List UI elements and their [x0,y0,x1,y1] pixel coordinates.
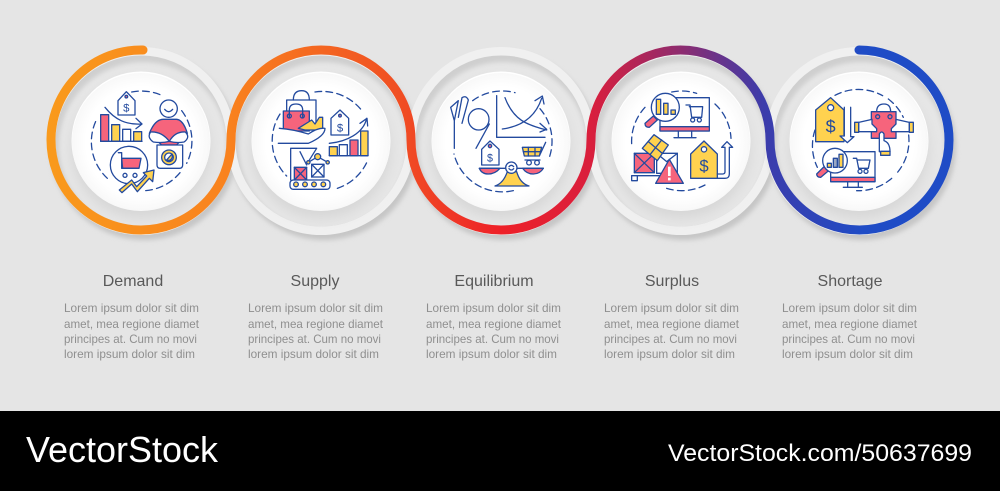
text block: supply: amet, mea regione diamet [248,317,384,331]
text block: surplus: principes at. Cum no movi [604,332,737,346]
icon: equilibrium [451,91,552,192]
footer logo: VectorStock [26,429,219,470]
text block: equilibrium: amet, mea regione diamet [426,317,562,331]
icon: supply [272,91,368,189]
icon: supply: $ [337,122,344,134]
text block: shortage: amet, mea regione diamet [782,317,918,331]
text block: surplus: lorem ipsum dolor sit dim [604,347,735,361]
text block: equilibrium: principes at. Cum no movi [426,332,559,346]
text block: equilibrium: Lorem ipsum dolor sit dim [426,301,561,315]
icon: demand [91,91,192,193]
footer bar [0,411,1000,491]
text block: equilibrium: lorem ipsum dolor sit dim [426,347,557,361]
ring bases [47,47,956,240]
heading: shortage: Shortage [818,273,883,290]
text block: demand: amet, mea regione diamet [64,317,200,331]
heading: demand: Demand [103,273,163,290]
icon: shortage: $ [826,117,836,137]
text block: demand: principes at. Cum no movi [64,332,197,346]
heading: surplus: Surplus [645,273,699,290]
text block: surplus: amet, mea regione diamet [604,317,740,331]
icon: surplus: $ [699,156,709,175]
icon: surplus [632,91,733,191]
text block: supply: lorem ipsum dolor sit dim [248,347,379,361]
heading: equilibrium: Equilibrium [454,273,534,290]
icon: shortage [812,89,913,191]
text block: supply: Lorem ipsum dolor sit dim [248,301,383,315]
text block: surplus: Lorem ipsum dolor sit dim [604,301,739,315]
text block: shortage: Lorem ipsum dolor sit dim [782,301,917,315]
winding gradient ribbon [51,50,949,230]
text block: demand: Lorem ipsum dolor sit dim [64,301,199,315]
text block: shortage: lorem ipsum dolor sit dim [782,347,913,361]
text block: shortage: principes at. Cum no movi [782,332,915,346]
icon: demand: $ [123,103,130,115]
text block: supply: principes at. Cum no movi [248,332,381,346]
icon: equilibrium: $ [487,152,493,164]
heading: supply: Supply [291,273,339,290]
text block: demand: lorem ipsum dolor sit dim [64,347,195,361]
footer image id: VectorStock.com/50637699 [668,440,972,467]
